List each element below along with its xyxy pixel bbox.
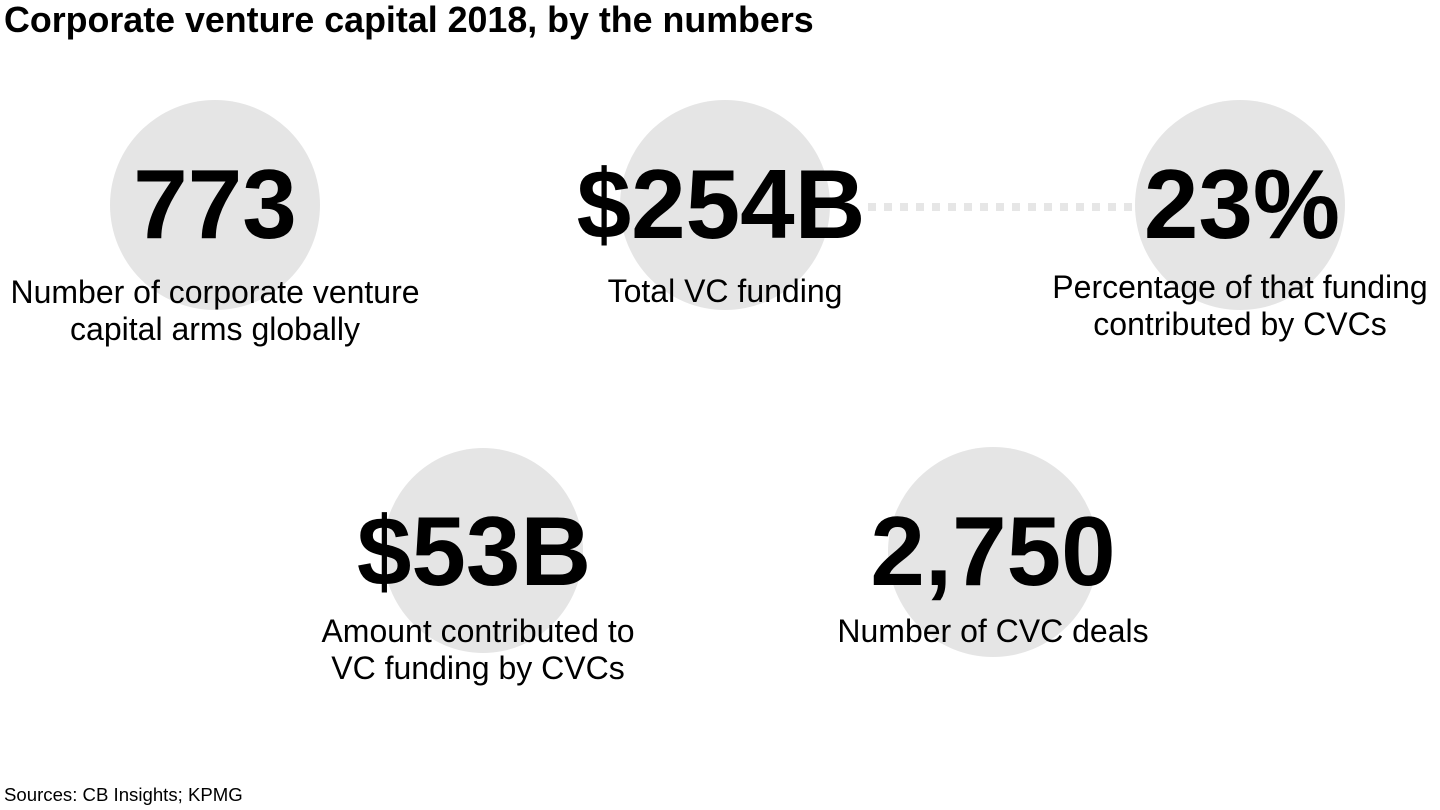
circle: [888, 447, 1098, 657]
label: [10, 274, 420, 347]
label: Total VC funding: [608, 273, 842, 309]
label: Percentage of that funding: [1052, 269, 1428, 305]
label: [321, 613, 635, 686]
number: 773: [133, 149, 297, 259]
number: 2,750: [870, 496, 1116, 606]
dotted connector: [868, 203, 1136, 211]
circle: [383, 448, 583, 653]
stat: $254B: [577, 100, 865, 310]
title: Corporate venture capital 2018, by the numbers: [4, 0, 814, 40]
circle: [110, 100, 320, 310]
sources: Sources: CB Insights; KPMG: [4, 784, 243, 805]
label: [1052, 269, 1428, 342]
label: contributed by CVCs: [1093, 306, 1387, 342]
label: Amount contributed to: [321, 613, 635, 649]
stat: 2,750: [837, 447, 1149, 657]
number: $53B: [357, 496, 591, 606]
stat: 23%: [1052, 100, 1428, 342]
label: capital arms globally: [70, 311, 360, 347]
circle: [620, 100, 830, 310]
label: Number of corporate venture: [10, 274, 420, 310]
stat: $53B: [321, 448, 635, 686]
circle: [1135, 100, 1345, 310]
label: VC funding by CVCs: [331, 650, 625, 686]
stat: 773: [10, 100, 420, 347]
number: $254B: [577, 149, 865, 259]
number: 23%: [1144, 149, 1340, 259]
label: Number of CVC deals: [837, 613, 1149, 649]
